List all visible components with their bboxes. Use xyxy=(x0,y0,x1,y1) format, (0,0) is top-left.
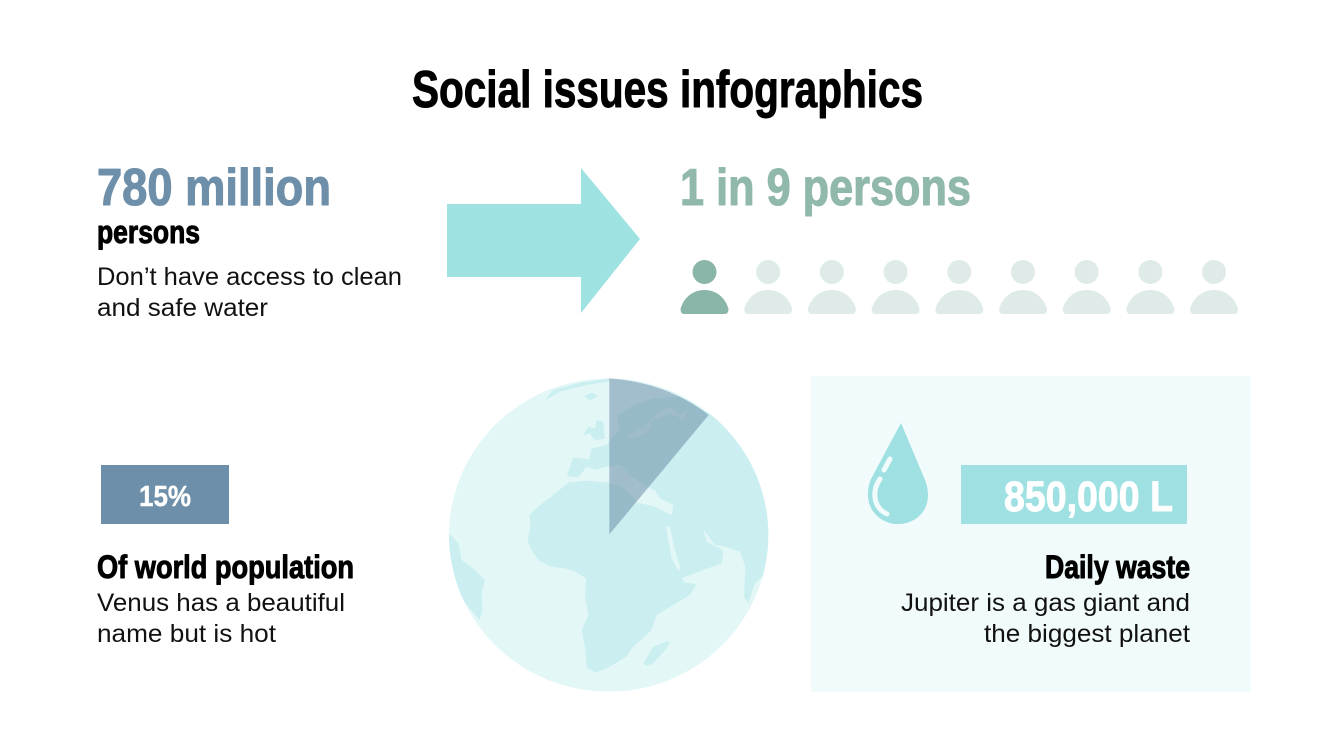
big number: 780 million: 780 million xyxy=(97,159,331,217)
text: jupiter xyxy=(901,589,1190,648)
text: venus: Venus has a beautiful xyxy=(97,589,345,617)
highlighted 15% slice xyxy=(609,378,709,534)
icon: water drop xyxy=(868,423,928,524)
globe ocean xyxy=(449,378,768,692)
subheading: persons: persons xyxy=(97,214,200,250)
text: venus: name but is hot xyxy=(97,620,276,648)
globe pie chart xyxy=(447,378,777,692)
badge: 15%: 15% xyxy=(139,481,191,513)
badge: 850,000 L xyxy=(961,465,1187,524)
heading: 1 in 9 persons: 1 in 9 persons xyxy=(680,159,971,217)
panel: 1 in 9 persons xyxy=(680,159,1238,314)
subheading: of world population: Of world population xyxy=(97,549,354,585)
text: jupiter: the biggest planet xyxy=(984,620,1190,648)
text: access to water xyxy=(97,263,402,322)
badge: 850,000 L: 850,000 L xyxy=(1004,473,1173,521)
panel: daily waste xyxy=(811,376,1251,692)
subheading: daily waste: Daily waste xyxy=(1045,549,1190,585)
badge: 15% xyxy=(101,465,229,524)
arrow xyxy=(447,168,640,313)
panel background xyxy=(811,376,1251,692)
text: jupiter: Jupiter is a gas giant and xyxy=(901,589,1190,617)
pictogram: nine people xyxy=(680,260,1238,314)
continents xyxy=(447,378,777,673)
title: Social issues infographics xyxy=(412,61,923,119)
panel: 15% of world population xyxy=(97,465,354,648)
panel: 780 million persons xyxy=(97,159,402,322)
text: access to water: Don’t have access to clean xyxy=(97,263,402,291)
text: venus xyxy=(97,589,345,648)
text: access to water: and safe water xyxy=(97,294,268,322)
